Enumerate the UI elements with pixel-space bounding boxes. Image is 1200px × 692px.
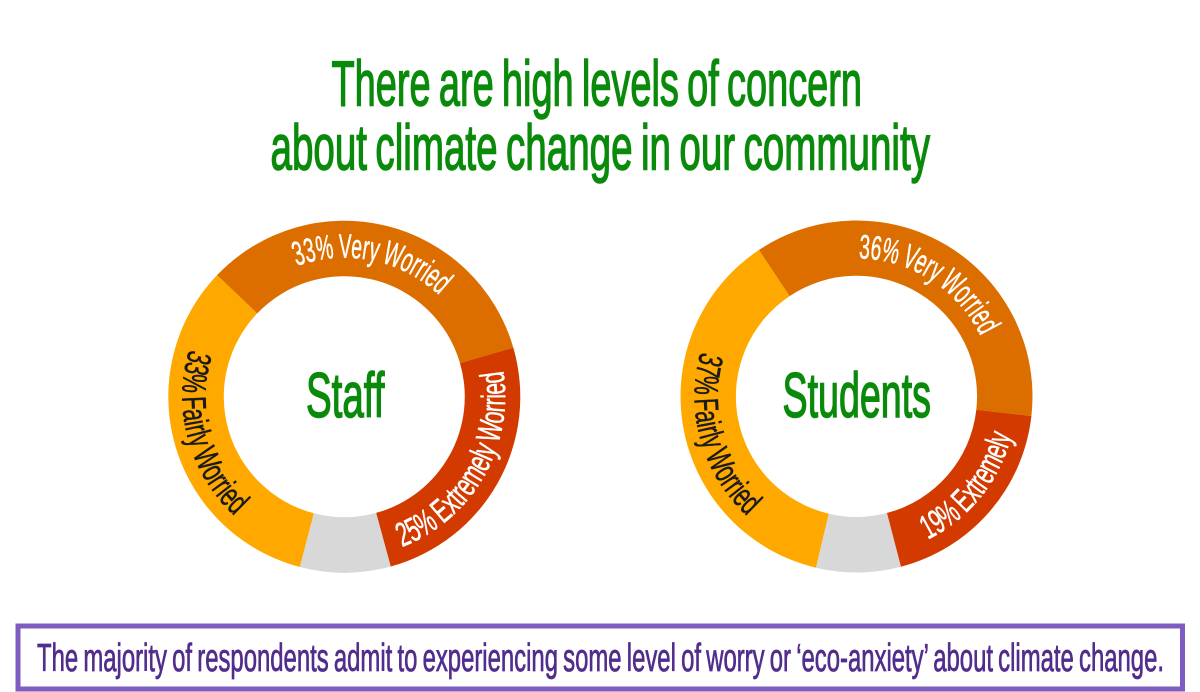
segment: students very worried <box>759 220 1032 416</box>
label: 25% extremely worried: 25% Extremely Worried <box>395 372 506 547</box>
segment: students not worried <box>816 513 901 572</box>
title <box>270 48 930 184</box>
segment: staff fairly worried <box>168 275 314 567</box>
segment: staff extremely worried <box>376 348 520 566</box>
label: 37% fairly worried: 37% Fairly Worried <box>694 354 764 516</box>
center label: staff: Staff <box>306 361 385 431</box>
segment: staff very worried <box>217 221 513 363</box>
label: 19% extremely: 19% Extremely <box>920 430 1017 540</box>
callout box <box>18 626 1182 689</box>
label: 33% very worried: 33% Very Worried <box>292 234 455 295</box>
segment: students extremely worried <box>887 410 1031 567</box>
title: There are high levels of concern <box>332 48 862 120</box>
segment: students fairly worried <box>681 250 829 568</box>
center label: students: Students <box>782 361 931 431</box>
donut chart: staff <box>168 220 520 573</box>
label: 33% fairly worried: 33% Fairly Worried <box>181 351 252 516</box>
label: 36% very worried: 36% Very Worried <box>860 234 1002 336</box>
segment: staff not worried <box>300 513 391 573</box>
donut chart: students <box>680 220 1032 572</box>
